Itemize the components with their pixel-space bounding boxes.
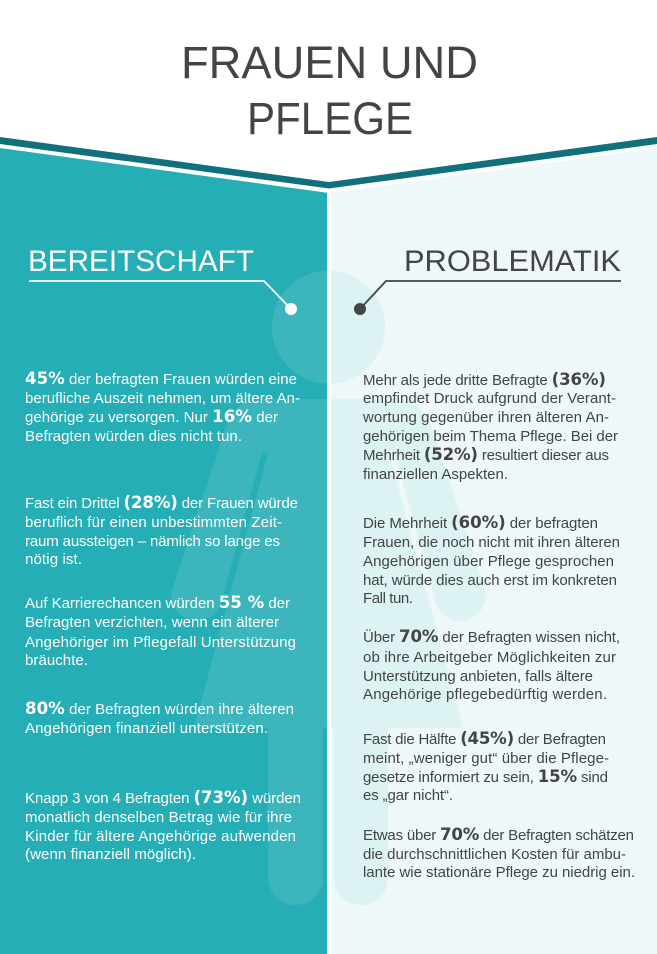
text block: 60% Mehrheit: Angehörigen über Pflege gesprochen	[363, 553, 614, 570]
text block: 45% Auszeit	[25, 369, 300, 445]
title: FRAUEN UND	[181, 37, 478, 88]
text block: 70% Arbeitgeber: Unterstützung anbieten, falls ältere	[363, 668, 593, 685]
text block: 60% Mehrheit: hat, würde dies auch erst im konkreten	[363, 572, 617, 589]
text block: 28% Ausstieg: Fast ein Drittel (28%) der Frauen würde	[25, 493, 298, 512]
text block: 55 % Karrierechancen: Auf Karrierechancen würden 55 % der	[25, 593, 290, 612]
text block: 36% Druck: gehörigen beim Thema Pflege. Bei der	[363, 428, 618, 445]
text block: 28% Ausstieg: raum aussteigen – nämlich so lange es	[25, 533, 280, 550]
panel: Problematik background	[331, 148, 657, 954]
text block: 73% Betrag: (wenn finanziell möglich).	[25, 846, 196, 863]
text block: 36% Druck: Mehr als jede dritte Befragte (36%)	[363, 370, 606, 389]
title: PFLEGE	[247, 93, 413, 144]
text block: 36% Druck	[362, 370, 618, 483]
text block: 55 % Karrierechancen: Befragten verzichten, wenn ein älterer	[25, 614, 279, 631]
text block: 70% Arbeitgeber: Über 70% der Befragten wissen nicht,	[363, 627, 620, 646]
text block: 55 % Karrierechancen	[25, 593, 296, 669]
text block: 70% Kosten	[363, 825, 635, 881]
text block: 73% Betrag: Knapp 3 von 4 Befragten (73%) würden	[25, 788, 301, 807]
chevron band	[0, 137, 657, 188]
text block: 70% Arbeitgeber: ob ihre Arbeitgeber Möglichkeiten zur	[363, 649, 616, 666]
connector: Bereitschaft rule and dot	[29, 281, 297, 315]
text block: 28% Ausstieg: nötig ist.	[25, 551, 82, 568]
text block: 45% Auszeit: gehörige zu versorgen. Nur 16% der	[25, 407, 278, 426]
text block: 28% Ausstieg	[25, 493, 298, 568]
text block: 70% Kosten: die durchschnittlichen Kosten für ambu-	[363, 846, 626, 863]
text block: 55 % Karrierechancen: Angehöriger im Pflegefall Unterstützung	[25, 634, 296, 651]
text block: 60% Mehrheit: Die Mehrheit (60%) der befragten	[363, 513, 598, 532]
text block: 36% Druck: empfindet Druck aufgrund der Verant-	[363, 390, 616, 407]
text block: 70% Kosten: Etwas über 70% der Befragten schätzen	[363, 825, 634, 844]
text block: 36% Druck: Mehrheit (52%) resultiert dieser aus	[363, 445, 609, 464]
text block: 60% Mehrheit: Fall tun.	[363, 590, 413, 607]
text block: 45% Pflegegesetze: es „gar nicht“.	[363, 787, 453, 804]
text block: 60% Mehrheit	[363, 513, 620, 607]
icon: person watermark, right half	[331, 270, 486, 905]
text block: 80% finanziell: 80% der Befragten würden ihre älteren	[25, 699, 294, 718]
text block: 60% Mehrheit: Frauen, die noch nicht mit ihren älteren	[363, 534, 620, 551]
text block: 80% finanziell	[25, 699, 294, 737]
text block: 70% Arbeitgeber: Angehörige pflegebedürftig werden.	[363, 686, 607, 703]
text block: 80% finanziell: Angehörigen finanziell unterstützen.	[25, 720, 268, 737]
text block: 73% Betrag: monatlich denselben Betrag wie für ihre	[25, 809, 292, 826]
text block: 70% Arbeitgeber	[363, 627, 620, 703]
text block: 36% Druck: wortung gegenüber ihren älteren An-	[362, 409, 609, 426]
heading: Problematik: PROBLEMATIK	[404, 245, 621, 278]
title	[181, 37, 478, 144]
text block: 45% Pflegegesetze: Fast die Hälfte (45%) der Befragten	[363, 729, 606, 748]
text block: 45% Auszeit: 45% der befragten Frauen würden eine	[25, 369, 297, 388]
text block: 36% Druck: finanziellen Aspekten.	[363, 466, 508, 483]
text block: 73% Betrag: Kinder für ältere Angehörige aufwenden	[25, 828, 296, 845]
text block: 28% Ausstieg: beruflich für einen unbestimmten Zeit-	[25, 514, 282, 531]
panel: Bereitschaft background	[0, 148, 327, 954]
text block: 73% Betrag	[25, 788, 301, 863]
text block: 70% Kosten: lante wie stationäre Pflege zu niedrig ein.	[363, 864, 635, 881]
text block: 45% Pflegegesetze	[363, 729, 609, 804]
heading: Bereitschaft: BEREITSCHAFT	[28, 245, 254, 278]
text block: 45% Pflegegesetze: gesetze informiert zu sein, 15% sind	[363, 767, 608, 786]
connector: Problematik rule and dot	[354, 281, 621, 315]
icon: person watermark, left half	[172, 270, 327, 905]
text block: 45% Pflegegesetze: meint, „weniger gut“ über die Pflege-	[363, 750, 609, 767]
text block: 55 % Karrierechancen: bräuchte.	[25, 652, 88, 669]
text block: 45% Auszeit: Befragten würden dies nicht tun.	[25, 428, 242, 445]
text block: 45% Auszeit: berufliche Auszeit nehmen, um ältere An-	[25, 390, 300, 407]
